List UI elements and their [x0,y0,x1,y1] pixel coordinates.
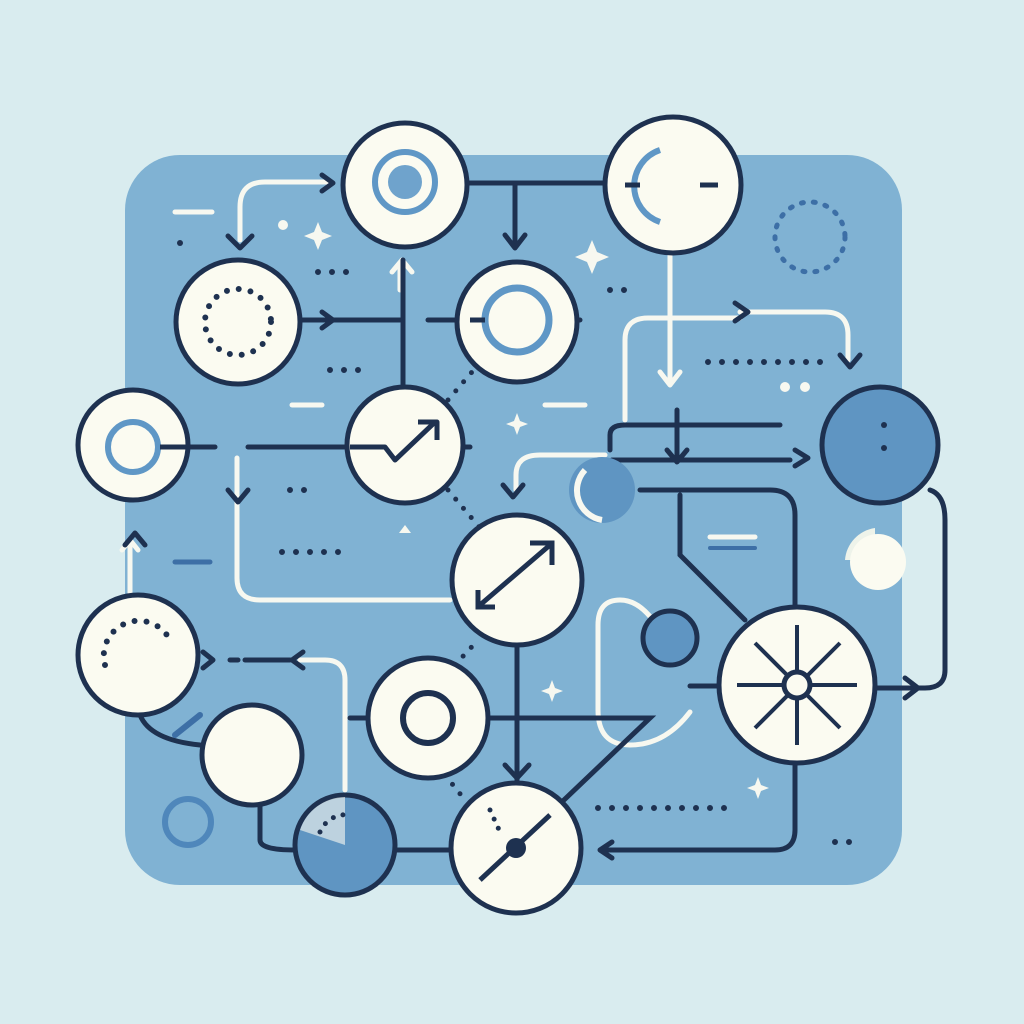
sparkles [304,222,769,799]
node 11: asterisk [719,607,875,763]
node 18: cream dot [845,528,906,590]
node 8: blue partial [569,457,635,523]
node 14: plain [202,705,302,805]
node 9: arrow [452,515,582,645]
node 1: target [343,123,467,247]
node 3: dotted ring [176,260,300,384]
light arrowheads [122,260,680,550]
node 6: arrow [347,387,463,503]
node 4: ring [457,262,577,382]
node 15: blue [295,795,395,895]
decorative dashes and dots [175,212,855,842]
node 5 [78,390,190,500]
dark connector lines [140,183,945,880]
node 12: small blue [643,611,697,665]
light connector paths [130,182,848,790]
icon: dotted ring top right [775,202,845,272]
panel: blue backdrop [125,155,902,885]
dotted links [445,365,480,800]
node 7: blue [822,387,938,503]
dark arrowheads [125,175,918,858]
node 2 [605,117,741,253]
node 13: target [368,658,488,778]
node 10 [78,595,198,715]
node 17: small blue ring [165,799,211,845]
node 16: clock [451,783,581,913]
